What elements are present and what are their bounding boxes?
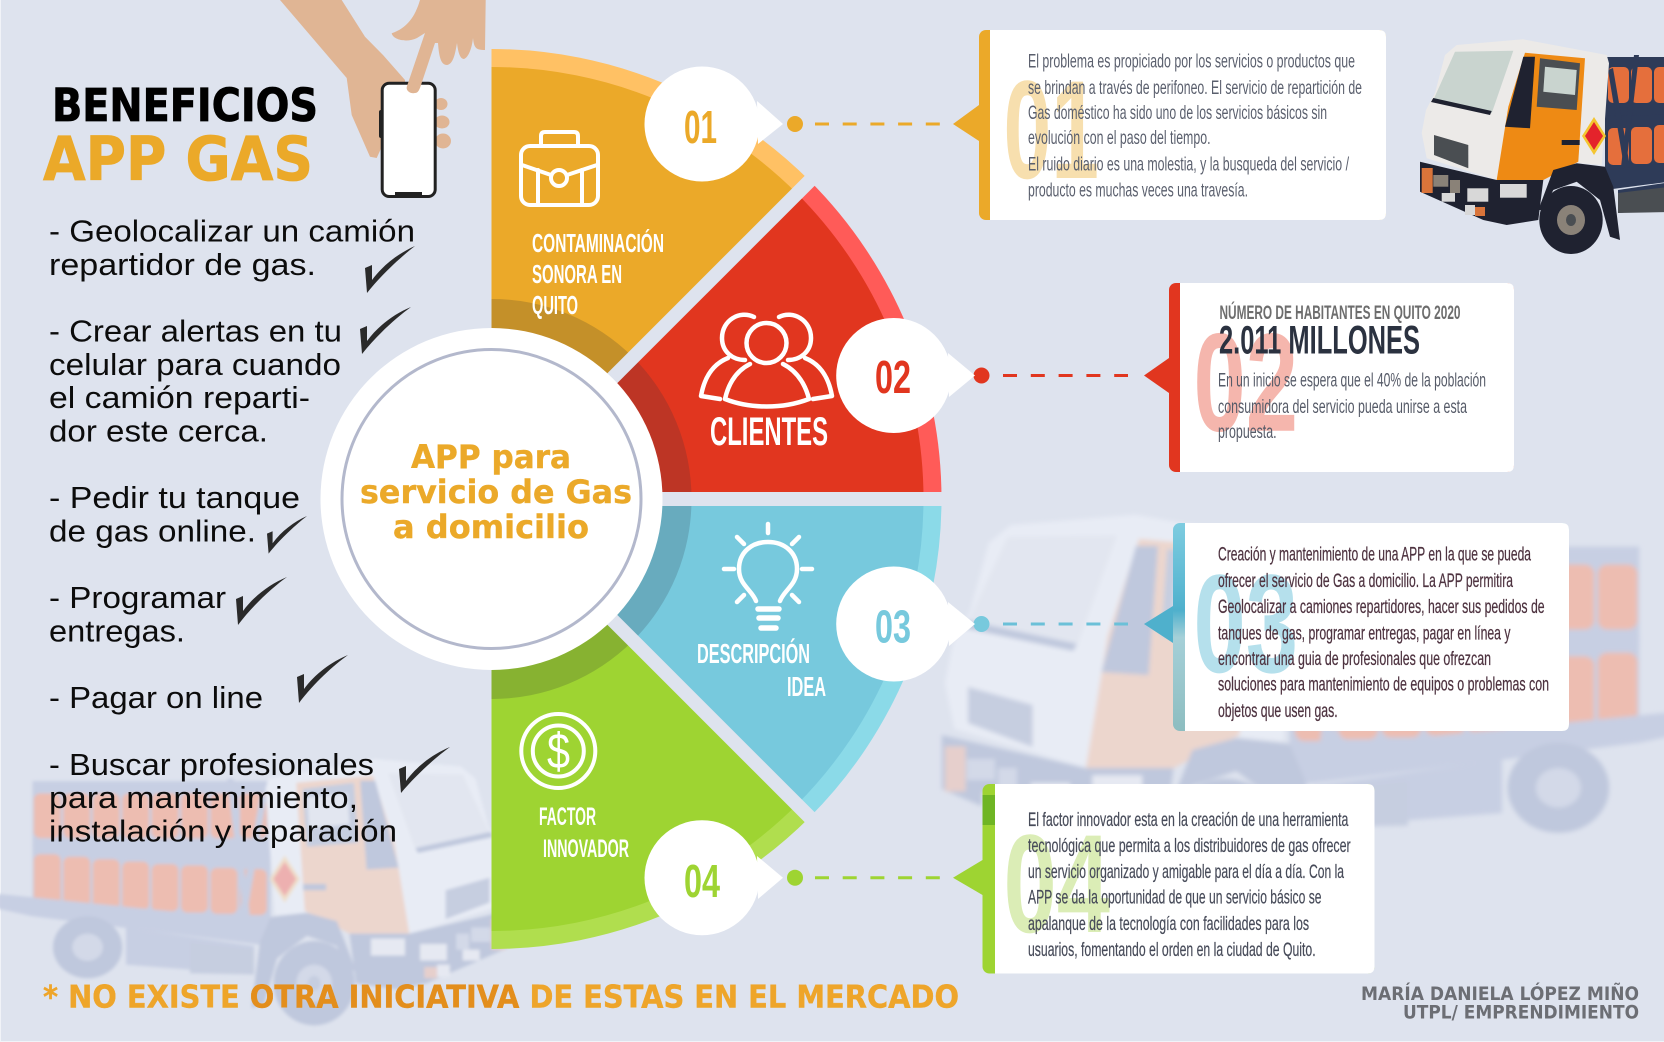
- number bubble 02: 02: [875, 351, 911, 403]
- label: descripción idea: DESCRIPCIÓN: [697, 638, 810, 669]
- benefits list: dor este cerca.: [49, 414, 268, 449]
- truck photo: top right: [1420, 39, 1664, 254]
- label: factor innovador: [539, 803, 629, 863]
- benefits list: - Pedir tu tanque: [49, 480, 300, 515]
- center circle: APP para: [411, 438, 571, 476]
- card 02: NÚMERO DE HABITANTES EN QUITO 2020: [1220, 302, 1460, 324]
- number bubble 04: 04: [684, 855, 720, 907]
- card 04: El factor innovador esta en la creación de una herramienta: [1028, 809, 1348, 831]
- card 01: evolución con el paso del tiempo.: [1028, 127, 1210, 149]
- author credit: UTPL/ EMPRENDIMIENTO: [1403, 1002, 1639, 1024]
- title: APP GAS: [43, 124, 313, 195]
- segment 02: red: [492, 181, 942, 499]
- card 04: apalanque de la tecnología con facilidades para los: [1028, 913, 1309, 935]
- card 01: Gas doméstico ha sido uno de los servicios básicos sin: [1028, 102, 1327, 124]
- label: clientes: CLIENTES: [710, 410, 828, 454]
- segment 01: orange: [492, 49, 810, 499]
- number bubble 04: [644, 820, 783, 935]
- segment 04: green: [492, 499, 810, 949]
- card 01: [953, 30, 1386, 220]
- benefits list: repartidor de gas.: [49, 247, 316, 282]
- center circle: servicio de Gas: [360, 473, 632, 511]
- number bubble 01: 01: [684, 101, 717, 153]
- card 02: [1144, 283, 1514, 472]
- author credit: [1361, 981, 1639, 1024]
- benefits list: - Crear alertas en tu: [49, 314, 342, 349]
- number bubble 02: [836, 318, 975, 433]
- segment 03: blue: [492, 499, 942, 817]
- card 01: se brindan a través de perifoneo. El servicio de repartición de: [1028, 77, 1362, 99]
- illustration: hand holding phone: [280, 0, 486, 197]
- card 01: producto es muchas veces una travesía.: [1028, 180, 1248, 202]
- benefits list: [49, 214, 415, 849]
- icon: briefcase: [521, 132, 598, 205]
- icon: people: [701, 315, 832, 406]
- icon: dollar coin: $: [547, 723, 570, 779]
- card 02: consumidora del servicio pueda unirse a esta: [1218, 396, 1467, 418]
- center circle: [320, 328, 662, 670]
- benefits list: el camión reparti-: [49, 380, 310, 415]
- connector 04: [787, 870, 941, 886]
- author credit: MARÍA DANIELA LÓPEZ MIÑO: [1361, 981, 1639, 1005]
- center circle: a domicilio: [393, 508, 589, 546]
- benefits list: de gas online.: [49, 514, 256, 549]
- benefits list: - Buscar profesionales: [49, 747, 374, 782]
- benefits list: para mantenimiento,: [49, 780, 358, 815]
- card 03: objetos que usen gas.: [1218, 700, 1338, 722]
- connector 02: [974, 368, 1128, 384]
- card 04: APP se da la oportunidad de que un servicio básico se: [1028, 887, 1322, 909]
- label: factor innovador: INNOVADOR: [543, 835, 629, 863]
- connector 03: [974, 616, 1128, 632]
- number bubble 03: [836, 566, 975, 682]
- card 02: 2.011 MILLONES: [1219, 318, 1420, 362]
- number bubble 01: [644, 66, 783, 182]
- card 02: propuesta.: [1218, 421, 1277, 443]
- faded truck: bottom left: [0, 759, 507, 1025]
- connector 01: [787, 116, 941, 132]
- card 01: El problema es propiciado por los servicios o productos que: [1028, 51, 1355, 73]
- card 04: [953, 784, 1374, 974]
- card 04: tecnológica que permita a los distribuidores de gas ofrecer: [1028, 835, 1351, 857]
- card 01: 01: [1004, 51, 1099, 208]
- label: factor innovador: FACTOR: [539, 803, 596, 831]
- benefits list: - Pagar on line: [49, 680, 263, 715]
- title: BENEFICIOS: [52, 79, 318, 132]
- footer note: * NO EXISTE OTRA INICIATIVA DE ESTAS EN EL MERCADO: [43, 980, 959, 1016]
- label: descripción idea: IDEA: [787, 671, 826, 702]
- icon: dollar coin: [521, 714, 595, 788]
- benefits list: entregas.: [49, 614, 185, 649]
- label: contaminación sonora en Quito: SONORA EN: [532, 261, 622, 289]
- label: contaminación sonora en Quito: QUITO: [532, 292, 578, 320]
- label: descripción idea: [697, 638, 826, 702]
- card 02: En un inicio se espera que el 40% de la población: [1218, 370, 1486, 392]
- icon: light bulb: [724, 524, 812, 628]
- card 04: usuarios, fomentando el orden en la ciudad de Quito.: [1028, 939, 1316, 961]
- card 02: 02: [1194, 304, 1298, 461]
- card 03: [1144, 523, 1569, 731]
- card 04: un servicio organizado y amigable para el día a día. Con la: [1028, 861, 1344, 883]
- card 01: El ruido diario es una molestia, y la busqueda del servicio /: [1028, 154, 1349, 176]
- label: contaminación sonora en Quito: [532, 228, 664, 320]
- check marks: [236, 246, 450, 793]
- title: [43, 79, 318, 195]
- card 03: 03: [1194, 545, 1298, 702]
- card 04: 04: [1004, 805, 1110, 962]
- label: contaminación sonora en Quito: CONTAMINACIÓN: [532, 228, 664, 258]
- benefits list: - Programar: [49, 580, 226, 615]
- benefits list: instalación y reparación: [49, 814, 397, 849]
- number bubble 03: 03: [875, 601, 911, 653]
- benefits list: celular para cuando: [49, 347, 341, 382]
- faded truck: right: [942, 515, 1664, 901]
- benefits list: - Geolocalizar un camión: [49, 214, 415, 248]
- card 03: encontrar una guia de profesionales que ofrezcan: [1218, 648, 1491, 670]
